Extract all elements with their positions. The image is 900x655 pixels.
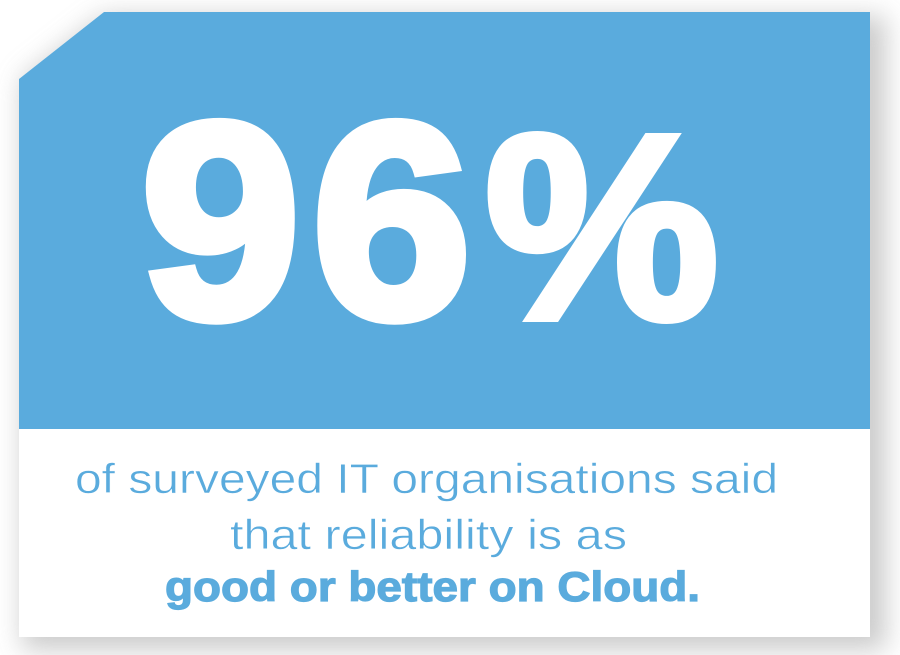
line 3: emphasis: good or better on Cloud. (165, 563, 700, 610)
blue panel with cut corner (19, 12, 870, 429)
big statistic: 96% (141, 66, 719, 376)
description text (75, 455, 778, 610)
digits 96: 96 (141, 66, 471, 376)
line 1: of surveyed IT organisations said (75, 455, 778, 502)
line 2: that reliability is as (230, 511, 627, 558)
percent sign: % (485, 80, 719, 374)
